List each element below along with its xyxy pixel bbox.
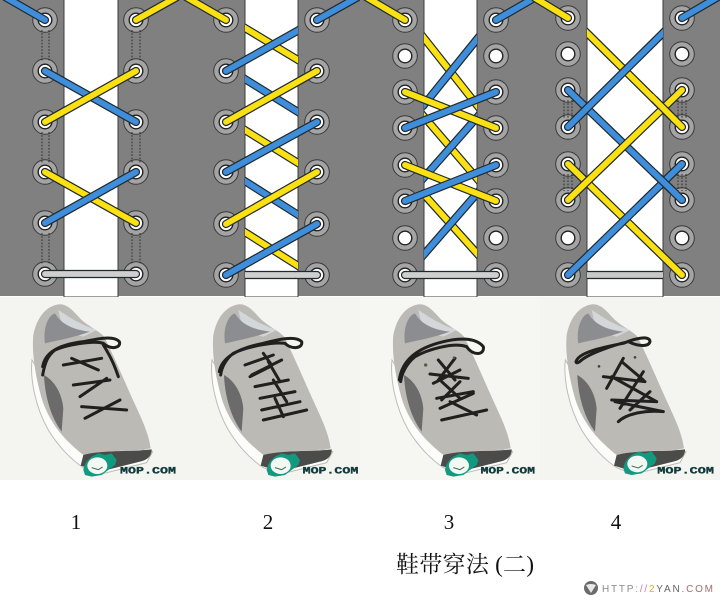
lace: blue upper cross [45, 71, 136, 122]
lace: yellow upper cross [45, 71, 136, 122]
lace: yellow upper cross [405, 92, 496, 128]
panel: lacing diagram 1 [0, 0, 180, 297]
shoe 1 laces [43, 338, 127, 418]
lace: yellow top end [366, 0, 405, 20]
lace: grey bar under [580, 271, 670, 279]
lace: yellow top end [186, 0, 226, 20]
lace: yellow falling lower [568, 164, 682, 275]
lace: yellow lower cross [405, 165, 496, 201]
shoe 3 laces [399, 339, 487, 420]
lace: blue top end [317, 0, 358, 20]
laces passing underneath [424, 32, 477, 260]
lace: yellow rising [568, 90, 682, 200]
photo: shoe 3 [360, 297, 540, 480]
title: 鞋带穿法 (二) [396, 552, 534, 577]
lace: blue top end [5, 0, 45, 20]
lace: blue crossing 2 [226, 122, 317, 172]
lace: blue upper cross [405, 92, 496, 128]
photo: shoe 4 [540, 297, 720, 480]
panel: lacing diagram 2 [180, 0, 360, 297]
laces passing underneath [245, 24, 298, 280]
label: number 1: 1 [71, 510, 81, 534]
photo: shoe 2: MOP.COM [303, 466, 358, 477]
lace: blue top end [682, 0, 718, 18]
watermark text: HTTP://2YAN.COM [602, 584, 713, 595]
lace: yellow crossing 3 [226, 172, 317, 224]
lace: blue rising [568, 164, 682, 275]
lace: yellow over-crossing patch [651, 96, 676, 121]
lace: yellow from top edge [579, 25, 682, 127]
icon: watermark logo [584, 581, 598, 595]
label: number 4: 4 [611, 510, 622, 534]
label: number 3: 3 [444, 510, 454, 534]
label: number 2: 2 [263, 510, 273, 534]
photo: shoe 1: MOP.COM [120, 466, 176, 477]
lace: blue top end [496, 0, 536, 20]
shoe 4 laces [576, 338, 663, 422]
lace: blue to top edge [568, 25, 671, 127]
lace: blue lower cross [45, 172, 136, 223]
lace: blue crossing 4 [226, 224, 317, 275]
photo: shoe 3: MOP.COM [481, 466, 535, 477]
lace: blue falling [568, 90, 682, 200]
lace: blue top crossing [226, 26, 306, 71]
lace: bottom grey bar [45, 270, 136, 278]
lace: yellow top end [535, 0, 568, 18]
lace: blue over-crossing patch [651, 170, 676, 194]
lace: grey bar end [296, 271, 317, 279]
panel: lacing diagram 3 [360, 0, 540, 297]
lace: grey bottom bar [405, 271, 496, 279]
lace: blue lower cross [405, 165, 496, 201]
photo: shoe 1 [0, 297, 180, 480]
panel: lacing diagram 4 [535, 0, 720, 297]
photo: shoe 4: MOP.COM [657, 466, 714, 477]
lace: yellow lower cross [45, 172, 136, 223]
lace: yellow top end [136, 0, 177, 20]
lace: yellow crossing 1 [226, 71, 317, 122]
photo: shoe 2 [180, 297, 360, 480]
shoe 2 laces [219, 338, 307, 420]
